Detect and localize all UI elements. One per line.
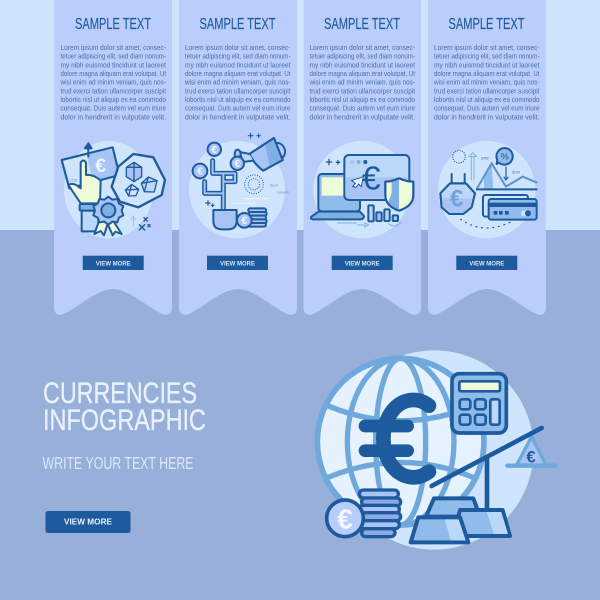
panel 3 body text: my nibh euismod tincidunt ut laoreet [310,60,416,69]
plus signs [206,133,260,207]
main title [43,377,206,437]
panel 1 banner shape [54,0,172,315]
dotted arc [461,219,510,228]
panel 3 body text: trud exerci tation ullamcorper suscipit [310,86,416,95]
chart up arrows [469,153,476,180]
octagon with gems [112,154,165,207]
panel 2 body text: dolore magna aliquam erat volutpat. Ut [185,69,291,78]
globe [317,358,484,525]
coin top: € [212,145,218,156]
panel 3 [304,0,421,315]
background: bottom band [0,230,600,600]
panel 1 body text: dolore magna aliquam erat volutpat. Ut [60,69,167,78]
panel 3 body text: dolor in hendrerit in vulputate velit. [310,112,415,121]
panel 3 heading: SAMPLE TEXT [324,16,400,33]
back card [483,195,528,217]
banknote: € [95,156,106,177]
panel 3 body text: wisi enim ad minim veniam, quis nos- [309,78,415,87]
panel 3 body text: lobortis nisl ut aliquip ex ea commodo [310,95,415,104]
money plant inner highlight [205,161,235,212]
panel 2 body text: lobortis nisl ut aliquip ex ea commodo [185,95,290,104]
panel 2 banner shape [179,0,297,315]
panel 2 heading: SAMPLE TEXT [200,16,276,33]
balance beam [432,428,542,486]
panel 1 [54,0,172,315]
panel 2 button [207,256,268,270]
down arrow [504,167,508,180]
panel 4 body text: my nibh euismod tincidunt ut laoreet [434,60,540,69]
coin stack [248,208,267,227]
panel 1 button [83,256,144,270]
panel 2 button: VIEW MORE [220,260,256,267]
award badge [93,197,123,225]
chart fill [484,163,493,189]
panel 4 body text: consequat. Duis autem vel eum iriure [434,104,540,113]
backdrop circle [64,141,153,238]
banknote [62,147,119,188]
euro coin octagon: € [450,185,463,212]
panel 3 button [332,256,393,270]
backdrop circle [189,141,285,238]
panel 1 heading: SAMPLE TEXT [75,16,151,33]
mini bar chart [368,205,398,221]
backdrop circle [334,350,534,550]
front card [489,199,537,220]
cursor [352,177,363,187]
main button: VIEW MORE [64,516,112,526]
panel 4 body text: lobortis nisl ut aliquip ex ea commodo [434,95,540,104]
growth labels: Boot [270,182,279,187]
dotted circle [453,150,465,163]
panel 4 illustration: euro coin, chart, percent bubble and cards [438,141,537,238]
percent bubble: % [500,152,509,162]
panel 3 button: VIEW MORE [345,260,380,267]
growth labels: Growth [277,189,289,194]
panel 1 body text: Lorem ipsum dolor sit amet, consec- [60,43,166,52]
panel 4 body text: trud exerci tation ullamcorper suscipit [434,86,540,95]
subtitle: WRITE YOUR TEXT HERE [42,453,194,473]
laptop [311,174,364,219]
panel 3 body text: tetuer adipiscing elit, sed diam nonum- [310,52,415,61]
small crosses [139,218,150,230]
coin beside stack: € [241,215,247,227]
big euro sign [365,400,429,477]
panel 2 body text: dolor in hendrerit in vulputate velit. [185,112,290,121]
calculator [452,374,506,433]
balance weight: € [526,448,536,467]
sleeve [80,204,100,231]
main button [46,511,130,533]
panel 4 button: VIEW MORE [469,260,505,267]
panel 3 body text: Lorem ipsum dolor sit amet, consec- [310,43,415,52]
flower pot [213,210,237,229]
chart line [477,163,537,189]
panel 2 body text: my nibh euismod tincidunt ut laoreet [185,60,291,69]
panel 3 body text: dolore magna aliquam erat volutpat. Ut [310,69,416,78]
gold bars [411,498,510,542]
panel 1 body text: tetuer adipiscing elit, sed diam nonum- [60,52,166,61]
panel 1 body text: wisi enim ad minim veniam, quis nos- [60,78,166,87]
panel 2 body text: wisi enim ad minim veniam, quis nos- [184,78,291,87]
shield [385,178,413,211]
panel 4 [428,0,546,315]
panel 4 body text: Lorem ipsum dolor sit amet, consec- [434,43,540,52]
backdrop circle [313,141,411,238]
main title: CURRENCIES [43,377,197,410]
up arrow [85,143,92,157]
panel 4 body text: dolore magna aliquam erat volutpat. Ut [434,69,540,78]
chart baseline [476,186,537,192]
panel 1 body text: dolor in hendrerit in vulputate velit. [60,112,166,121]
hero illustration: globe, euro, calculator, scale, gold and coins [317,350,555,550]
chart labels [481,157,520,175]
panel 2 body text [184,43,291,121]
panel 3 body text [309,43,416,121]
panel 4 body text: tetuer adipiscing elit, sed diam nonum- [434,52,540,61]
background: top band [0,0,600,230]
panel 2 body text: tetuer adipiscing elit, sed diam nonum- [185,52,291,61]
coin left: € [197,167,203,178]
panel 3 illustration: laptop, monitor, euro and shield [311,141,413,238]
chart labels: $234 [512,171,520,175]
coin right: € [235,159,241,170]
panel 1 body text: lobortis nisl ut aliquip ex ea commodo [60,95,166,104]
money plant [205,161,235,212]
light lines [233,199,268,203]
panel 1 body text: trud exerci tation ullamcorper suscipit [60,86,167,95]
ribbons [94,218,122,235]
dashed arc and arrow [337,222,402,227]
panel 2 illustration: watering can growing a money plant [189,133,289,238]
euro coin [327,500,363,537]
panel 1 body text [60,43,167,121]
pointing hand [68,160,101,203]
balance post [480,457,494,510]
panel 4 body text: dolor in hendrerit in vulputate velit. [434,112,540,121]
euro coin: € [337,503,353,534]
growth labels [270,182,289,194]
panel 4 banner shape [428,0,546,315]
panel 4 button [456,256,517,270]
panel 1 body text: my nibh euismod tincidunt ut laoreet [60,60,167,69]
panel 1 button: VIEW MORE [96,260,131,267]
panel 2 body text: trud exerci tation ullamcorper suscipit [185,86,291,95]
dotted target [245,175,263,194]
panel 2 body text: Lorem ipsum dolor sit amet, consec- [185,43,291,52]
panel 2 [179,0,297,315]
panel 4 body text [433,43,540,121]
faint arrow [131,216,136,227]
monitor: € [362,160,381,197]
banknote: 100 [69,178,78,183]
backdrop circle [438,141,535,238]
panel 4 heading: SAMPLE TEXT [448,16,525,33]
chart labels: $456 [481,157,489,161]
main title: INFOGRAPHIC [43,404,206,437]
panel 1 body text: consequat. Duis autem vel eum iriure [60,104,166,113]
panel 3 body text: consequat. Duis autem vel eum iriure [310,104,415,113]
coin stack [359,490,401,537]
balance weight [507,437,555,467]
panel 1 illustration: hand, banknote, gems and award badge [62,141,165,238]
plus signs [326,159,340,165]
watering can [235,138,285,171]
panel 4 body text: wisi enim ad minim veniam, quis nos- [433,78,540,87]
panel 2 body text: consequat. Duis autem vel eum iriure [185,104,290,113]
panel 3 banner shape [304,0,421,315]
